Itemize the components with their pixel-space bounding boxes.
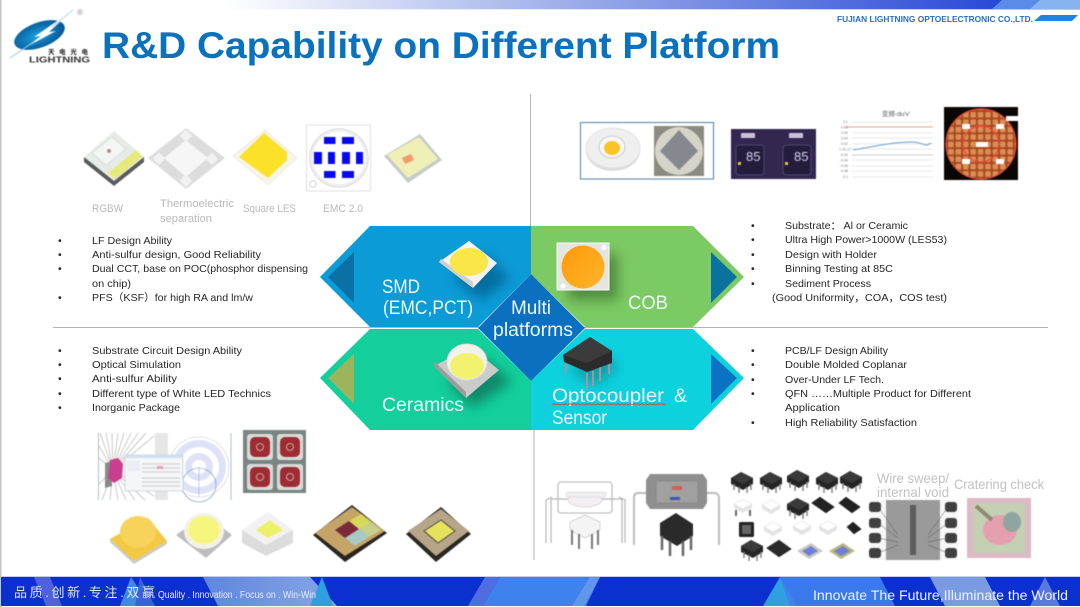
Optocoupler and Sensor label: Optocoupler bbox=[552, 386, 665, 407]
text block: Optocoupler bullets: Application bbox=[785, 402, 840, 414]
text block: COB bullets: Binning Testing at 85C bbox=[785, 263, 893, 275]
chart: colour shift du'v': 0.04 bbox=[841, 136, 848, 140]
text block: COB bullets: • bbox=[751, 278, 755, 290]
icon: flat ceramic LED bbox=[242, 512, 293, 556]
text block: Optocoupler bullets: Double Molded Coplanar bbox=[785, 359, 908, 371]
panel: Multi platforms centre: platforms bbox=[493, 320, 573, 341]
wafer map bbox=[944, 107, 1018, 180]
Optocoupler and Sensor label: Sensor bbox=[552, 408, 608, 429]
panel: Optocoupler and Sensor bbox=[531, 329, 744, 430]
text block: Ceramics bullets: • bbox=[58, 402, 62, 414]
SMD image captions: EMC 2.0 bbox=[323, 203, 363, 215]
text block: COB bullets bbox=[751, 220, 947, 304]
text block: Ceramics bullets: Optical Simulation bbox=[92, 359, 181, 371]
icon: four-chip module bbox=[313, 505, 387, 562]
text block: Optocoupler bullets: • bbox=[751, 417, 755, 429]
text block: Optocoupler bullets: QFN ……Multiple Product for Different bbox=[785, 388, 971, 400]
chart: colour shift du'v': 0.06 bbox=[841, 131, 848, 135]
text block: SMD bullets: • bbox=[58, 292, 62, 304]
icon: dual colour package bbox=[384, 134, 442, 183]
cratering check photo bbox=[967, 498, 1031, 558]
SMD image captions: separation bbox=[160, 213, 212, 225]
chart: colour shift du'v': 0.02 bbox=[841, 142, 848, 146]
text block: SMD bullets: Anti-sulfur design, Good Reliability bbox=[92, 249, 262, 261]
chart: colour shift du'v': 变频-du'v' bbox=[882, 109, 910, 118]
SMD label bbox=[382, 277, 473, 319]
icon: white dome LED bbox=[176, 513, 232, 558]
panel: Multi platforms centre: Multi bbox=[511, 298, 551, 319]
text block: SMD bullets: • bbox=[58, 263, 62, 275]
text block: SMD bullets: LF Design Ability bbox=[92, 235, 173, 247]
text block: Optocoupler bullets bbox=[751, 345, 971, 429]
optocoupler image captions bbox=[877, 470, 1045, 500]
panel: hexagon diagram bbox=[320, 226, 744, 430]
panel: Ceramics bbox=[320, 329, 531, 430]
footer values text: 品 质 . 创 新 . 专 注 . 双 赢 bbox=[14, 585, 155, 600]
ceramics simulation and package photos bbox=[98, 430, 471, 564]
icon: RGBW package bbox=[84, 131, 144, 186]
text block: SMD bullets: • bbox=[58, 235, 62, 247]
SMD image captions: Square LES bbox=[243, 203, 296, 215]
chart: colour shift du'v': 0.1 bbox=[843, 120, 848, 124]
text block: COB bullets: • bbox=[751, 234, 755, 246]
text block: SMD bullets bbox=[58, 235, 308, 304]
text block: SMD bullets: • bbox=[58, 249, 62, 261]
assorted package grid bbox=[731, 470, 862, 561]
text block: Optocoupler bullets: • bbox=[751, 388, 755, 400]
panel: SMD bbox=[320, 226, 531, 327]
text block: COB bullets: Design with Holder bbox=[785, 249, 878, 261]
chart: colour shift du'v': -0.1 bbox=[842, 175, 848, 179]
chart: colour shift du'v' bbox=[839, 109, 933, 179]
logo: Lightning: ® bbox=[77, 8, 83, 17]
Ceramics label: Ceramics bbox=[382, 395, 464, 416]
divider lines bbox=[53, 94, 1048, 560]
icon: SMD LED bbox=[439, 241, 510, 300]
text block: Ceramics bullets: • bbox=[58, 373, 62, 385]
text block: COB bullets: Substrate： Al or Ceramic bbox=[785, 220, 908, 232]
icon: COB LED bbox=[557, 243, 618, 300]
icon: yellow dome LED bbox=[110, 516, 167, 564]
text block: Optocoupler bullets: • bbox=[751, 374, 755, 386]
optocoupler outline, white bbox=[546, 482, 625, 549]
text block: Ceramics bullets bbox=[58, 345, 271, 414]
wire sweep x-ray bbox=[869, 500, 958, 560]
text block: COB bullets: (Good Uniformity，COA，COS test) bbox=[772, 292, 947, 304]
text block: COB bullets: Ultra High Power>1000W (LES53) bbox=[785, 234, 947, 246]
text block: Optocoupler bullets: High Reliability Satisfaction bbox=[785, 417, 917, 429]
SMD product images bbox=[84, 125, 442, 191]
chart: colour shift du'v': -0.02 bbox=[840, 153, 848, 157]
icon: ceramic LED bbox=[434, 344, 512, 408]
text block: SMD bullets: Dual CCT, base on POC(phosphor dispensing bbox=[92, 263, 308, 275]
text block: Ceramics bullets: • bbox=[58, 359, 62, 371]
text block: Optocoupler bullets: PCB/LF Design Ability bbox=[785, 345, 889, 357]
footer values text bbox=[14, 585, 316, 601]
title: R&D Capability on Different Platform bbox=[102, 25, 780, 66]
SMD label: SMD bbox=[382, 277, 420, 298]
text block: SMD bullets: on chip) bbox=[92, 278, 131, 290]
chart: colour shift du'v': -0.04 bbox=[840, 158, 848, 162]
icon: single-chip module bbox=[406, 507, 471, 562]
optocoupler images bbox=[546, 470, 1031, 561]
logo: Lightning: 天电光电 bbox=[48, 47, 88, 56]
chart: colour shift du'v': 1.1E-17 bbox=[839, 148, 851, 152]
SMD image captions: Thermoelectric bbox=[160, 198, 234, 210]
COB label: COB bbox=[628, 293, 668, 314]
company name: FUJIAN LIGHTNING OPTOELECTRONIC CO.,LTD. bbox=[837, 14, 1033, 24]
optocoupler image captions: Wire sweep/ bbox=[877, 470, 949, 486]
binning test photo bbox=[731, 129, 816, 179]
COB product images bbox=[580, 107, 1018, 180]
optocoupler image captions: internal void bbox=[877, 484, 949, 500]
optocoupler outline, black bbox=[634, 474, 719, 556]
binning test photo: 85 bbox=[746, 149, 760, 164]
logo: Lightning bbox=[10, 8, 90, 64]
footer values text: Quality . Innovation . Focus on . Win-Win bbox=[158, 590, 316, 601]
text block: COB bullets: Sediment Process bbox=[785, 278, 871, 290]
text block: Ceramics bullets: Different type of White LED Technics bbox=[92, 388, 271, 400]
text block: COB bullets: • bbox=[751, 220, 755, 232]
footer slogan: Innovate The Future,Illuminate the World bbox=[813, 588, 1068, 603]
text block: COB bullets: • bbox=[751, 263, 755, 275]
binning test photo: 85 bbox=[794, 149, 808, 164]
icon: optocoupler chip bbox=[563, 337, 620, 389]
SMD label: (EMC,PCT) bbox=[383, 298, 473, 319]
text block: Ceramics bullets: Anti-sulfur Ability bbox=[92, 373, 178, 385]
text block: Ceramics bullets: Inorganic Package bbox=[92, 402, 180, 414]
text block: Optocoupler bullets: Over-Under LF Tech. bbox=[785, 374, 884, 386]
text block: SMD bullets: PFS（KSF）for high RA and lm/w bbox=[92, 292, 253, 304]
optocoupler image captions: Cratering check bbox=[954, 476, 1045, 492]
Optocoupler and Sensor label bbox=[552, 386, 687, 429]
icon: thermoelectric separation package bbox=[148, 128, 225, 189]
footer bar bbox=[1, 576, 1080, 606]
Optocoupler and Sensor label: & bbox=[674, 386, 687, 407]
chart: colour shift du'v': -0.08 bbox=[840, 169, 848, 173]
text block: Ceramics bullets: • bbox=[58, 388, 62, 400]
text block: Optocoupler bullets: • bbox=[751, 359, 755, 371]
text block: Ceramics bullets: Substrate Circuit Design Ability bbox=[92, 345, 243, 357]
panel: COB bbox=[531, 226, 744, 327]
SMD image captions bbox=[92, 198, 363, 225]
icon: EMC 2.0 layout bbox=[306, 125, 370, 191]
icon: Square LES package bbox=[233, 130, 297, 185]
optical simulation screenshot bbox=[98, 433, 231, 502]
chart: colour shift du'v': 0.08 bbox=[841, 126, 848, 130]
text block: Ceramics bullets: • bbox=[58, 345, 62, 357]
logo: Lightning: LIGHTNING bbox=[29, 56, 90, 64]
SMD image captions: RGBW bbox=[92, 203, 124, 215]
ceramic package photo bbox=[243, 430, 306, 493]
COB holder photos bbox=[580, 122, 714, 179]
chart: colour shift du'v': -0.06 bbox=[840, 164, 848, 168]
text block: Optocoupler bullets: • bbox=[751, 345, 755, 357]
text block: COB bullets: • bbox=[751, 249, 755, 261]
panel: Multi platforms centre bbox=[478, 274, 585, 381]
